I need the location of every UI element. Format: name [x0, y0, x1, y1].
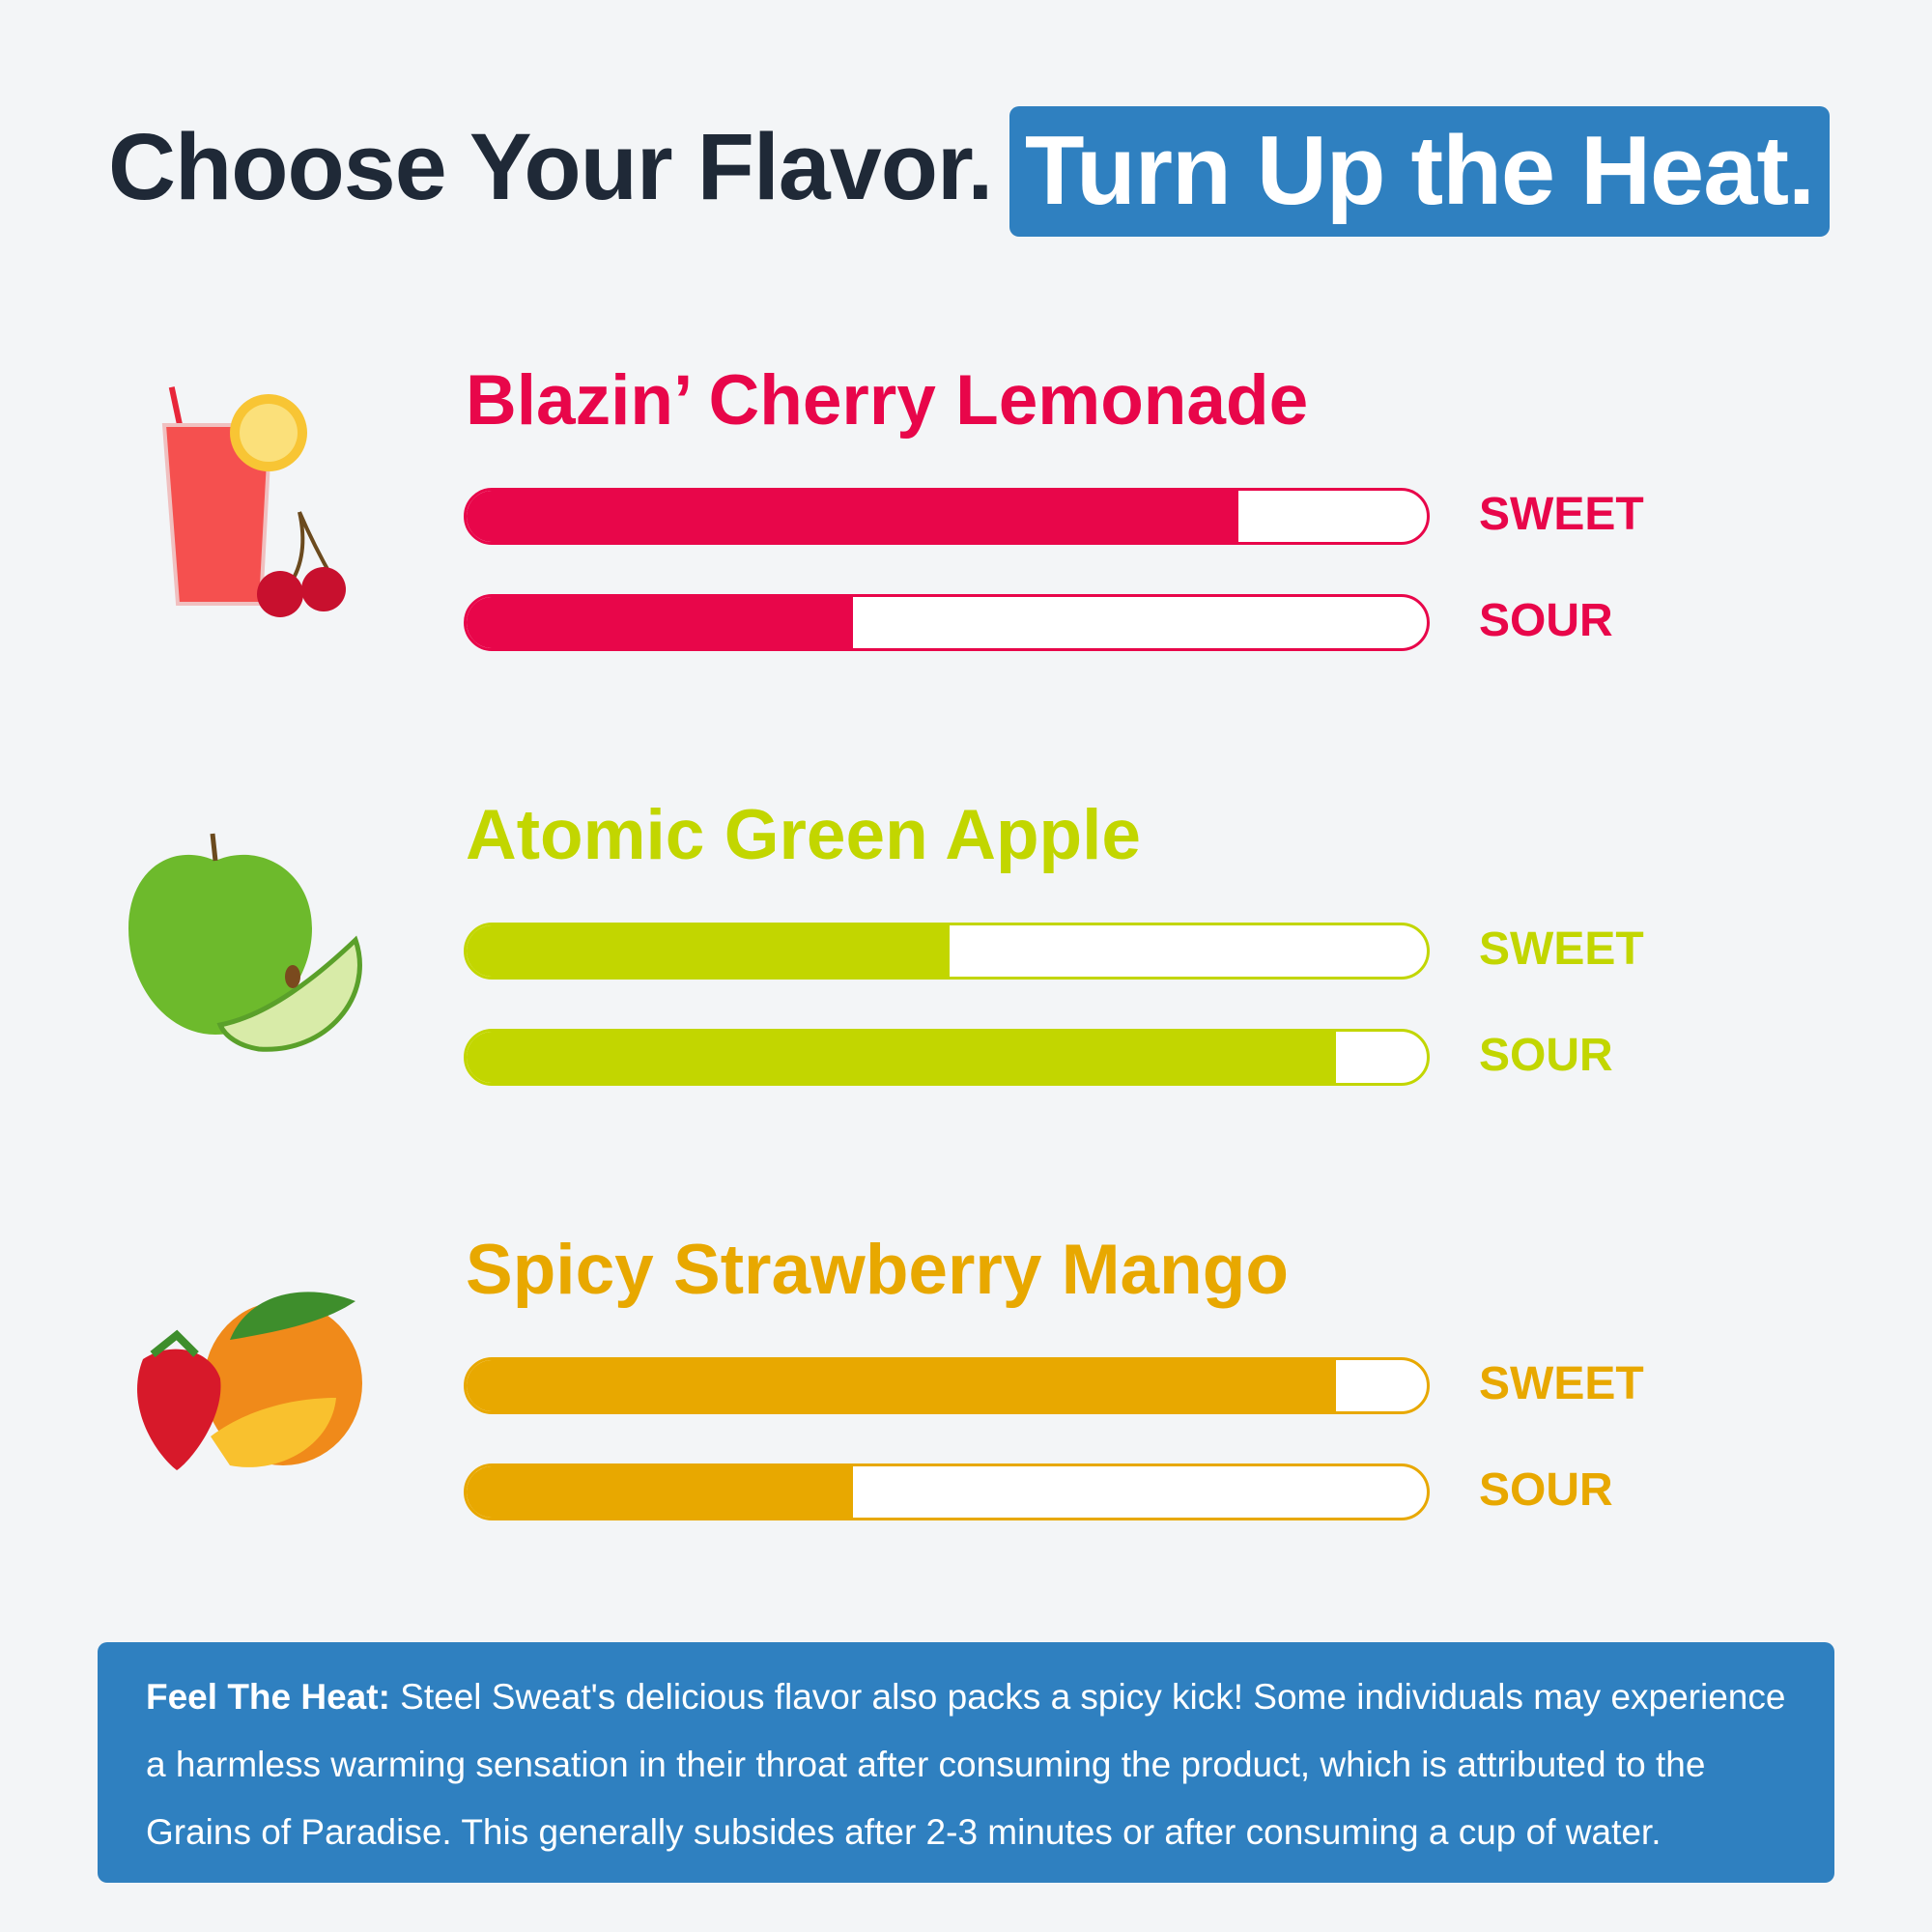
bar: mango sour: [464, 1463, 1430, 1520]
callout: feel the heat: [98, 1642, 1834, 1883]
bar: apple sour: [464, 1029, 1430, 1086]
bar: cherry sweet: [464, 488, 1430, 545]
bar: mango sweet: [464, 1357, 1430, 1414]
bar: cherry sour: [464, 594, 1430, 651]
callout: feel the heat: Feel The Heat: Steel Sweat's delicious flavor also packs a spicy kick! Some individuals may experience a harmless warming sensation in their throat after consuming the product, which is attributed to the Grains of Paradise. This generally subsides after 2-3 minutes or after consuming a cup of water.: [146, 1677, 1785, 1852]
bar: apple sweet: [464, 923, 1430, 980]
label: sour: SOUR: [1479, 1030, 1613, 1081]
heading: mango: Spicy Strawberry Mango: [466, 1231, 1289, 1309]
label: sour: SOUR: [1479, 1464, 1613, 1516]
title: Choose Your Flavor.: [108, 114, 992, 219]
label: sweet: SWEET: [1479, 1358, 1644, 1409]
label: sweet: SWEET: [1479, 489, 1644, 540]
label: sweet: SWEET: [1479, 923, 1644, 975]
icon: lemonade with cherries: [162, 386, 346, 617]
title highlight: Turn Up the Heat.: [1025, 117, 1814, 225]
label: sour: SOUR: [1479, 595, 1613, 646]
heading: apple: Atomic Green Apple: [466, 796, 1141, 874]
icon: strawberry mango: [137, 1292, 362, 1470]
icon: green apple: [128, 833, 362, 1052]
heading: cherry: Blazin’ Cherry Lemonade: [466, 361, 1308, 440]
